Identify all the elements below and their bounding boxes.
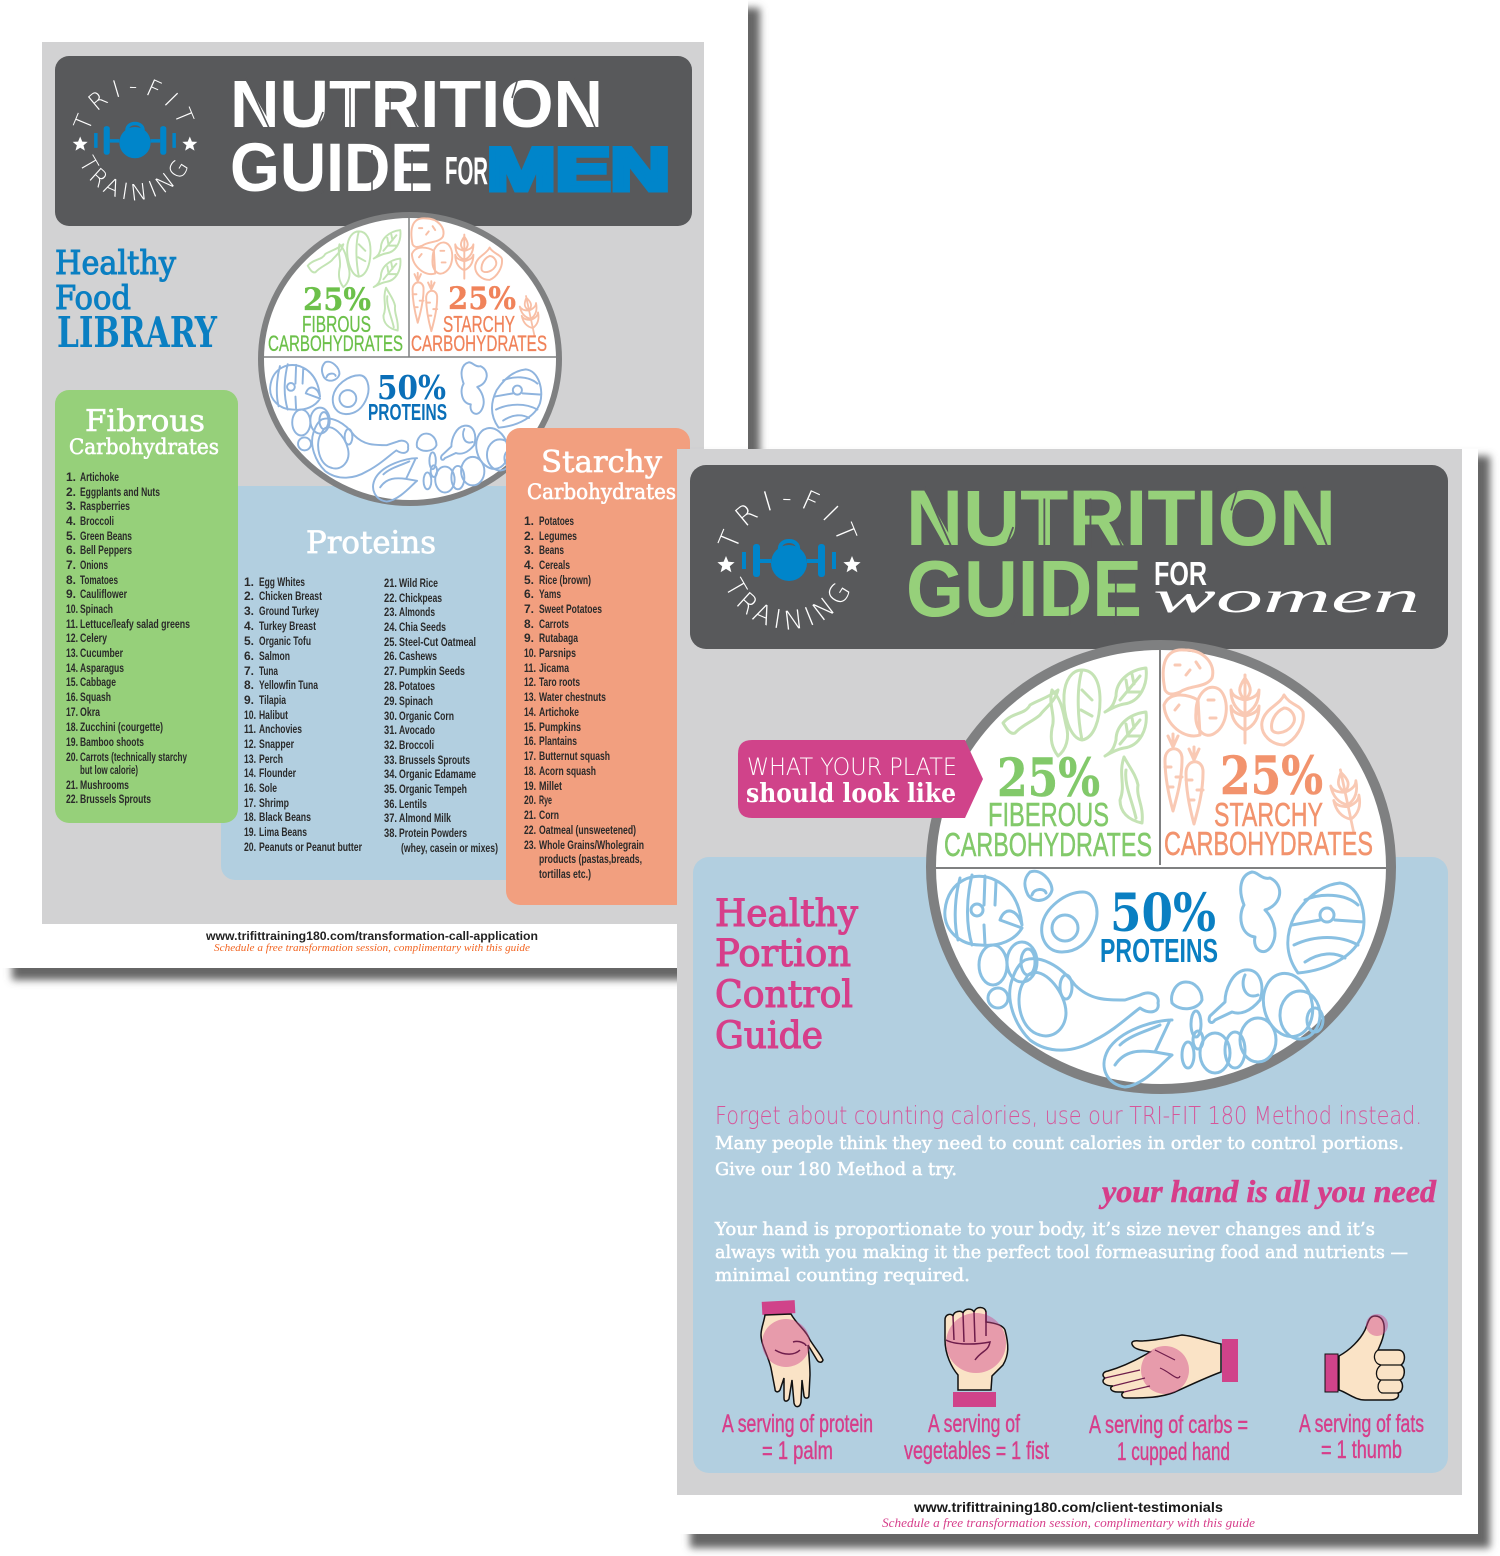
fibrous list: Eggplants and Nuts	[80, 485, 160, 499]
proteins list column 1: 4.	[244, 619, 254, 633]
heading: Fibrous Carbohydrates	[69, 404, 219, 459]
icons: vegetables, men	[308, 230, 400, 331]
serving captions	[722, 1410, 1424, 1466]
fibrous list: 1.	[66, 470, 76, 484]
proteins list column 2: Organic Tempeh	[399, 782, 467, 796]
label: 25% fiberous carbohydrates: 25%	[997, 748, 1100, 809]
fibrous list: 13.	[66, 646, 78, 660]
heading: Healthy Portion Control Guide	[715, 892, 858, 1057]
starchy list: 15.	[524, 720, 536, 734]
proteins list column 2: 34.	[384, 767, 397, 781]
starchy list: 1.	[524, 514, 534, 528]
fibrous list: Tomatoes	[80, 573, 118, 587]
heading: Healthy Portion Control Guide: Healthy	[715, 892, 858, 935]
intro paragraph	[715, 1133, 1404, 1180]
heading: Healthy Food Library	[55, 243, 218, 357]
starchy list: Parsnips	[539, 646, 576, 660]
fibrous list: Cucumber	[80, 646, 123, 660]
starchy list: Cereals	[539, 558, 570, 572]
proteins list column 1: 5.	[244, 634, 254, 648]
fibrous list: Onions	[80, 558, 108, 572]
starchy list: Artichoke	[539, 705, 579, 719]
proteins list column 1: 13.	[244, 752, 256, 766]
fibrous list: 11.	[66, 617, 78, 631]
proteins list column 1: Perch	[259, 752, 283, 766]
icon: fist	[945, 1308, 1008, 1407]
heading: Healthy Food Library: Food	[55, 278, 131, 317]
serving captions: A serving of carbs =	[1089, 1411, 1248, 1439]
proteins list column 1: 12.	[244, 737, 256, 751]
fibrous list: Broccoli	[80, 514, 114, 528]
proteins list column 1: 9.	[244, 693, 254, 707]
proteins list column 1: Chicken Breast	[259, 589, 322, 603]
fibrous list: 17.	[66, 705, 78, 719]
label: 25% starchy carbohydrates: 25%	[448, 281, 516, 317]
serving captions: A serving of	[928, 1410, 1020, 1438]
starchy list: 4.	[524, 558, 534, 572]
callout: what your plate should look like	[738, 740, 983, 818]
serving captions: vegetables = 1 fist	[904, 1437, 1049, 1465]
starchy list: Jicama	[539, 661, 569, 675]
proteins list column 2: Steel-Cut Oatmeal	[399, 635, 476, 649]
fibrous list	[66, 470, 190, 806]
starchy list: tortillas etc.)	[539, 867, 591, 881]
intro paragraph: Many people think they need to count calories in order to control portions.	[715, 1133, 1404, 1154]
label: 25% fibrous carbohydrates	[268, 282, 403, 356]
starchy list: 22.	[524, 823, 536, 837]
icons: proteins, men	[270, 362, 541, 502]
proteins list column 1: 11.	[244, 722, 256, 736]
starchy list: 21.	[524, 808, 536, 822]
back sheet: men's guide	[0, 0, 760, 980]
proteins list column 1: 8.	[244, 678, 254, 692]
heading: Healthy Portion Control Guide: Portion	[715, 932, 851, 975]
proteins list column 1: 14.	[244, 766, 256, 780]
proteins list column 1: Tilapia	[259, 693, 286, 707]
women title: women	[1153, 573, 1420, 622]
women footer	[882, 1499, 1255, 1530]
starchy list: Butternut squash	[539, 749, 610, 763]
fibrous list: 14.	[66, 661, 78, 675]
starchy list: 7.	[524, 602, 534, 616]
proteins list column 1: 1.	[244, 575, 254, 589]
proteins list column 1: 6.	[244, 649, 254, 663]
serving captions: = 1 palm	[762, 1437, 833, 1465]
fibrous list: Bamboo shoots	[80, 735, 144, 749]
starchy list: 18.	[524, 764, 536, 778]
label: 25% starchy carbohydrates: CARBOHYDRATES	[411, 331, 547, 356]
proteins list column 1: 16.	[244, 781, 256, 795]
starchy list: Sweet Potatoes	[539, 602, 602, 616]
fibrous list: 5.	[66, 529, 76, 543]
starchy list: 19.	[524, 779, 536, 793]
fibrous list: 20.	[66, 750, 78, 764]
fibrous list: Bell Peppers	[80, 543, 132, 557]
panel: proteins	[221, 486, 521, 880]
men footer: Schedule a free transformation session, complimentary with this guide	[214, 942, 530, 954]
proteins list column 2: 26.	[384, 649, 397, 663]
script heading: your hand is all you need: your hand is all you need	[1098, 1173, 1437, 1209]
proteins list column 1: Black Beans	[259, 810, 311, 824]
proteins list column 2: Almonds	[399, 605, 435, 619]
proteins list column 2: 29.	[384, 694, 397, 708]
proteins list column 2: Brussels Sprouts	[399, 753, 470, 767]
heading: Proteins: Proteins	[306, 525, 436, 561]
label: 50% proteins	[1100, 883, 1218, 969]
heading: Starchy Carbohydrates: Starchy	[541, 445, 662, 480]
label: 25% fiberous carbohydrates	[944, 748, 1152, 863]
proteins list column 1: Peanuts or Peanut butter	[259, 840, 362, 854]
starchy list: 10.	[524, 646, 536, 660]
proteins list column 1: Ground Turkey	[259, 604, 319, 618]
proteins list column 2: Wild Rice	[399, 576, 438, 590]
heading: Healthy Portion Control Guide: Guide	[715, 1014, 823, 1057]
label: 50% proteins: 50%	[1110, 883, 1216, 944]
men footer	[205, 929, 538, 954]
proteins list column 2: Chickpeas	[399, 591, 442, 605]
men title	[230, 67, 670, 206]
serving captions: A serving of protein	[722, 1410, 873, 1438]
starchy list: Yams	[539, 587, 561, 601]
proteins list column 2: Lentils	[399, 797, 427, 811]
starchy list: Oatmeal (unsweetened)	[539, 823, 636, 837]
callout: what your plate should look like: WHAT YOUR PLATE	[747, 753, 957, 781]
women title: FOR	[1154, 555, 1207, 592]
serving captions: A serving of fats	[1299, 1410, 1424, 1438]
proteins list column 1: Anchovies	[259, 722, 302, 736]
proteins list column 2: 36.	[384, 797, 397, 811]
women title: NUTRITION	[906, 473, 1336, 562]
heading: Healthy Food Library: LIBRARY	[57, 308, 218, 357]
fibrous list: Celery	[80, 631, 107, 645]
label: 25% fiberous carbohydrates: CARBOHYDRATES	[944, 826, 1152, 863]
starchy list: Plantains	[539, 734, 577, 748]
starchy list: 14.	[524, 705, 536, 719]
starchy list: Beans	[539, 543, 564, 557]
starchy list	[524, 514, 644, 881]
proteins list column 2: 28.	[384, 679, 397, 693]
fibrous list: 2.	[66, 485, 76, 499]
women footer: www.trifittraining180.com/client-testimonials	[913, 1499, 1223, 1515]
proteins list column 2: 35.	[384, 782, 397, 796]
icon: thumb up	[1325, 1314, 1404, 1400]
proteins list column 2: Cashews	[399, 649, 437, 663]
proteins list column 2: 30.	[384, 709, 397, 723]
label: 25% starchy carbohydrates: 25%	[1220, 746, 1323, 807]
label: 50% proteins	[368, 368, 447, 425]
starchy list: Corn	[539, 808, 559, 822]
fibrous list: 9.	[66, 587, 76, 601]
fibrous list: 7.	[66, 558, 76, 572]
fibrous list: 12.	[66, 631, 78, 645]
fibrous list: Green Beans	[80, 529, 132, 543]
proteins list column 1: Shrimp	[259, 796, 289, 810]
men header banner	[55, 56, 692, 226]
front sheet: women's guide	[677, 449, 1490, 1548]
serving captions: = 1 thumb	[1321, 1436, 1402, 1464]
proteins list column 2: Spinach	[399, 694, 433, 708]
men footer: www.trifittraining180.com/transformation-call-application	[205, 929, 538, 943]
starchy list: 8.	[524, 617, 534, 631]
starchy list: 16.	[524, 734, 536, 748]
fibrous list: 15.	[66, 675, 78, 689]
explanation paragraph	[714, 1219, 1408, 1286]
label: 50% proteins: PROTEINS	[1100, 932, 1218, 969]
heading: Starchy Carbohydrates	[527, 445, 676, 504]
fibrous list: 16.	[66, 690, 78, 704]
icons: starches, women	[1163, 650, 1366, 834]
men title: GUIDE	[230, 129, 433, 206]
fibrous list: 22.	[66, 792, 78, 806]
proteins list column 2	[384, 576, 498, 855]
fibrous list: Cauliflower	[80, 587, 127, 601]
fibrous list: Squash	[80, 690, 111, 704]
starchy list: Carrots	[539, 617, 569, 631]
fibrous list: Asparagus	[80, 661, 124, 675]
starchy list: 23.	[524, 838, 536, 852]
proteins list column 1: Yellowfin Tuna	[259, 678, 318, 692]
icons: starches, men	[411, 218, 543, 337]
starchy list: 3.	[524, 543, 534, 557]
fibrous list: 10.	[66, 602, 78, 616]
fibrous list: Zucchini (courgette)	[80, 720, 163, 734]
fibrous list: 3.	[66, 499, 76, 513]
proteins list column 2: Potatoes	[399, 679, 435, 693]
label: 25% starchy carbohydrates: CARBOHYDRATES	[1164, 825, 1373, 862]
starchy list: Legumes	[539, 529, 577, 543]
callout: what your plate should look like: should look like	[746, 779, 956, 809]
plate: women's portion chart	[931, 645, 1391, 1089]
fibrous list: Raspberries	[80, 499, 130, 513]
starchy list: 5.	[524, 573, 534, 587]
heading: Healthy Food Library: Healthy	[55, 243, 176, 282]
label: 25% starchy carbohydrates	[411, 281, 547, 356]
women title: GUIDE	[906, 544, 1142, 633]
starchy list: products (pastas,breads,	[539, 852, 642, 866]
icons: vegetables, women	[1003, 668, 1146, 823]
starchy list: 2.	[524, 529, 534, 543]
starchy list: Rye	[539, 793, 552, 807]
fibrous list: Carrots (technically starchy	[80, 750, 187, 764]
panel: portion control guide	[693, 857, 1448, 1473]
label: 25% starchy carbohydrates	[1164, 746, 1373, 862]
proteins list column 2: 25.	[384, 635, 397, 649]
proteins list column 2: 22.	[384, 591, 397, 605]
logo: Tri-Fit Training, men	[68, 72, 202, 207]
fibrous list: Brussels Sprouts	[80, 792, 151, 806]
starchy list: Potatoes	[539, 514, 574, 528]
explanation paragraph: Your hand is proportionate to your body, it’s size never changes and it’s	[714, 1219, 1375, 1240]
label: 25% starchy carbohydrates: STARCHY	[443, 311, 515, 337]
logo: Tri-Fit Training, women	[713, 483, 865, 637]
proteins list column 2: Broccoli	[399, 738, 434, 752]
proteins list column 1: Snapper	[259, 737, 294, 751]
panel: fibrous carbohydrates	[55, 390, 238, 823]
women header banner	[690, 465, 1448, 649]
proteins list column 2: Organic Corn	[399, 709, 454, 723]
proteins list column 1: Organic Tofu	[259, 634, 311, 648]
proteins list column 2: 37.	[384, 811, 397, 825]
starchy list: Rutabaga	[539, 631, 578, 645]
men title: NUTRITION	[230, 67, 603, 142]
starchy list: 17.	[524, 749, 536, 763]
proteins list column 1: 10.	[244, 708, 256, 722]
fibrous list: 6.	[66, 543, 76, 557]
fibrous list: Lettuce/leafy salad greens	[80, 617, 190, 631]
proteins list column 2: 31.	[384, 723, 397, 737]
label: 25% fibrous carbohydrates: 25%	[303, 282, 371, 318]
women footer: Schedule a free transformation session, complimentary with this guide	[882, 1515, 1255, 1530]
proteins list column 2: Avocado	[399, 723, 435, 737]
starchy list: 9.	[524, 631, 534, 645]
label: 25% fiberous carbohydrates: FIBEROUS	[988, 796, 1109, 833]
panel: starchy carbohydrates	[506, 428, 690, 905]
proteins list column 2: 33.	[384, 753, 397, 767]
label: 25% fibrous carbohydrates: CARBOHYDRATES	[268, 331, 403, 356]
proteins list column 2: Almond Milk	[399, 811, 451, 825]
proteins list column 1: 17.	[244, 796, 256, 810]
proteins list column 2: Protein Powders	[399, 826, 467, 840]
proteins list column 1: Egg Whites	[259, 575, 305, 589]
men title: MEN	[487, 136, 670, 203]
proteins list column 1	[244, 575, 362, 854]
fibrous list: Mushrooms	[80, 778, 129, 792]
starchy list: Millet	[539, 779, 562, 793]
proteins list column 2: 38.	[384, 826, 397, 840]
proteins list column 2: 24.	[384, 620, 397, 634]
fibrous list: 18.	[66, 720, 78, 734]
serving captions: 1 cupped hand	[1117, 1438, 1230, 1466]
starchy list: Whole Grains/Wholegrain	[539, 838, 644, 852]
proteins list column 1: 19.	[244, 825, 256, 839]
label: 50% proteins: PROTEINS	[368, 399, 447, 425]
heading: Fibrous Carbohydrates: Fibrous	[85, 404, 205, 439]
starchy list: 11.	[524, 661, 536, 675]
label: 50% proteins: 50%	[377, 368, 446, 407]
proteins list column 1: 3.	[244, 604, 254, 618]
proteins list column 1: 20.	[244, 840, 256, 854]
starchy list: Acorn squash	[539, 764, 596, 778]
fibrous list: Cabbage	[80, 675, 116, 689]
fibrous list: but low calorie)	[80, 763, 138, 777]
starchy list: 20.	[524, 793, 536, 807]
men title: FOR	[445, 150, 488, 193]
proteins list column 1: Lima Beans	[259, 825, 307, 839]
starchy list: Water chestnuts	[539, 690, 606, 704]
proteins list column 1: 18.	[244, 810, 256, 824]
intro paragraph: Give our 180 Method a try.	[715, 1159, 957, 1180]
icons: proteins, women	[945, 871, 1364, 1087]
fibrous list: 8.	[66, 573, 76, 587]
fibrous list: Spinach	[80, 602, 113, 616]
proteins list column 2: 27.	[384, 664, 397, 678]
fibrous list: Okra	[80, 705, 100, 719]
explanation paragraph: minimal counting required.	[715, 1265, 970, 1286]
starchy list: Taro roots	[539, 675, 580, 689]
fibrous list: 4.	[66, 514, 76, 528]
heading: Starchy Carbohydrates: Carbohydrates	[527, 480, 676, 504]
women title	[906, 473, 1420, 633]
proteins list column 1: 2.	[244, 589, 254, 603]
proteins list column 1: Salmon	[259, 649, 290, 663]
proteins list column 2: 21.	[384, 576, 397, 590]
proteins list column 2: 32.	[384, 738, 397, 752]
label: 25% starchy carbohydrates: STARCHY	[1214, 796, 1323, 833]
proteins list column 1: Sole	[259, 781, 277, 795]
proteins list column 2: 23.	[384, 605, 397, 619]
proteins list column 1: Halibut	[259, 708, 288, 722]
proteins list column 1: Tuna	[259, 664, 278, 678]
proteins list column 1: 7.	[244, 664, 254, 678]
starchy list: 6.	[524, 587, 534, 601]
icon: palm	[761, 1300, 823, 1407]
fibrous list: 21.	[66, 778, 78, 792]
icon: cupped hand	[1103, 1335, 1238, 1398]
starchy list: Pumpkins	[539, 720, 581, 734]
starchy list: 12.	[524, 675, 536, 689]
fibrous list: Artichoke	[80, 470, 119, 484]
proteins list column 2: (whey, casein or mixes)	[401, 841, 498, 855]
proteins list column 1: Turkey Breast	[259, 619, 316, 633]
starchy list: Rice (brown)	[539, 573, 591, 587]
starchy list: 13.	[524, 690, 536, 704]
explanation paragraph: always with you making it the perfect tool formeasuring food and nutrients —	[715, 1242, 1408, 1263]
proteins list column 2: Pumpkin Seeds	[399, 664, 465, 678]
plate: men's portion chart	[261, 215, 559, 503]
label: 25% fibrous carbohydrates: FIBROUS	[302, 311, 371, 337]
proteins list column 2: Chia Seeds	[399, 620, 446, 634]
proteins list column 2: Organic Edamame	[399, 767, 476, 781]
fibrous list: 19.	[66, 735, 78, 749]
heading: Healthy Portion Control Guide: Control	[715, 973, 853, 1016]
proteins list column 1: Flounder	[259, 766, 296, 780]
heading: Fibrous Carbohydrates: Carbohydrates	[69, 435, 219, 459]
